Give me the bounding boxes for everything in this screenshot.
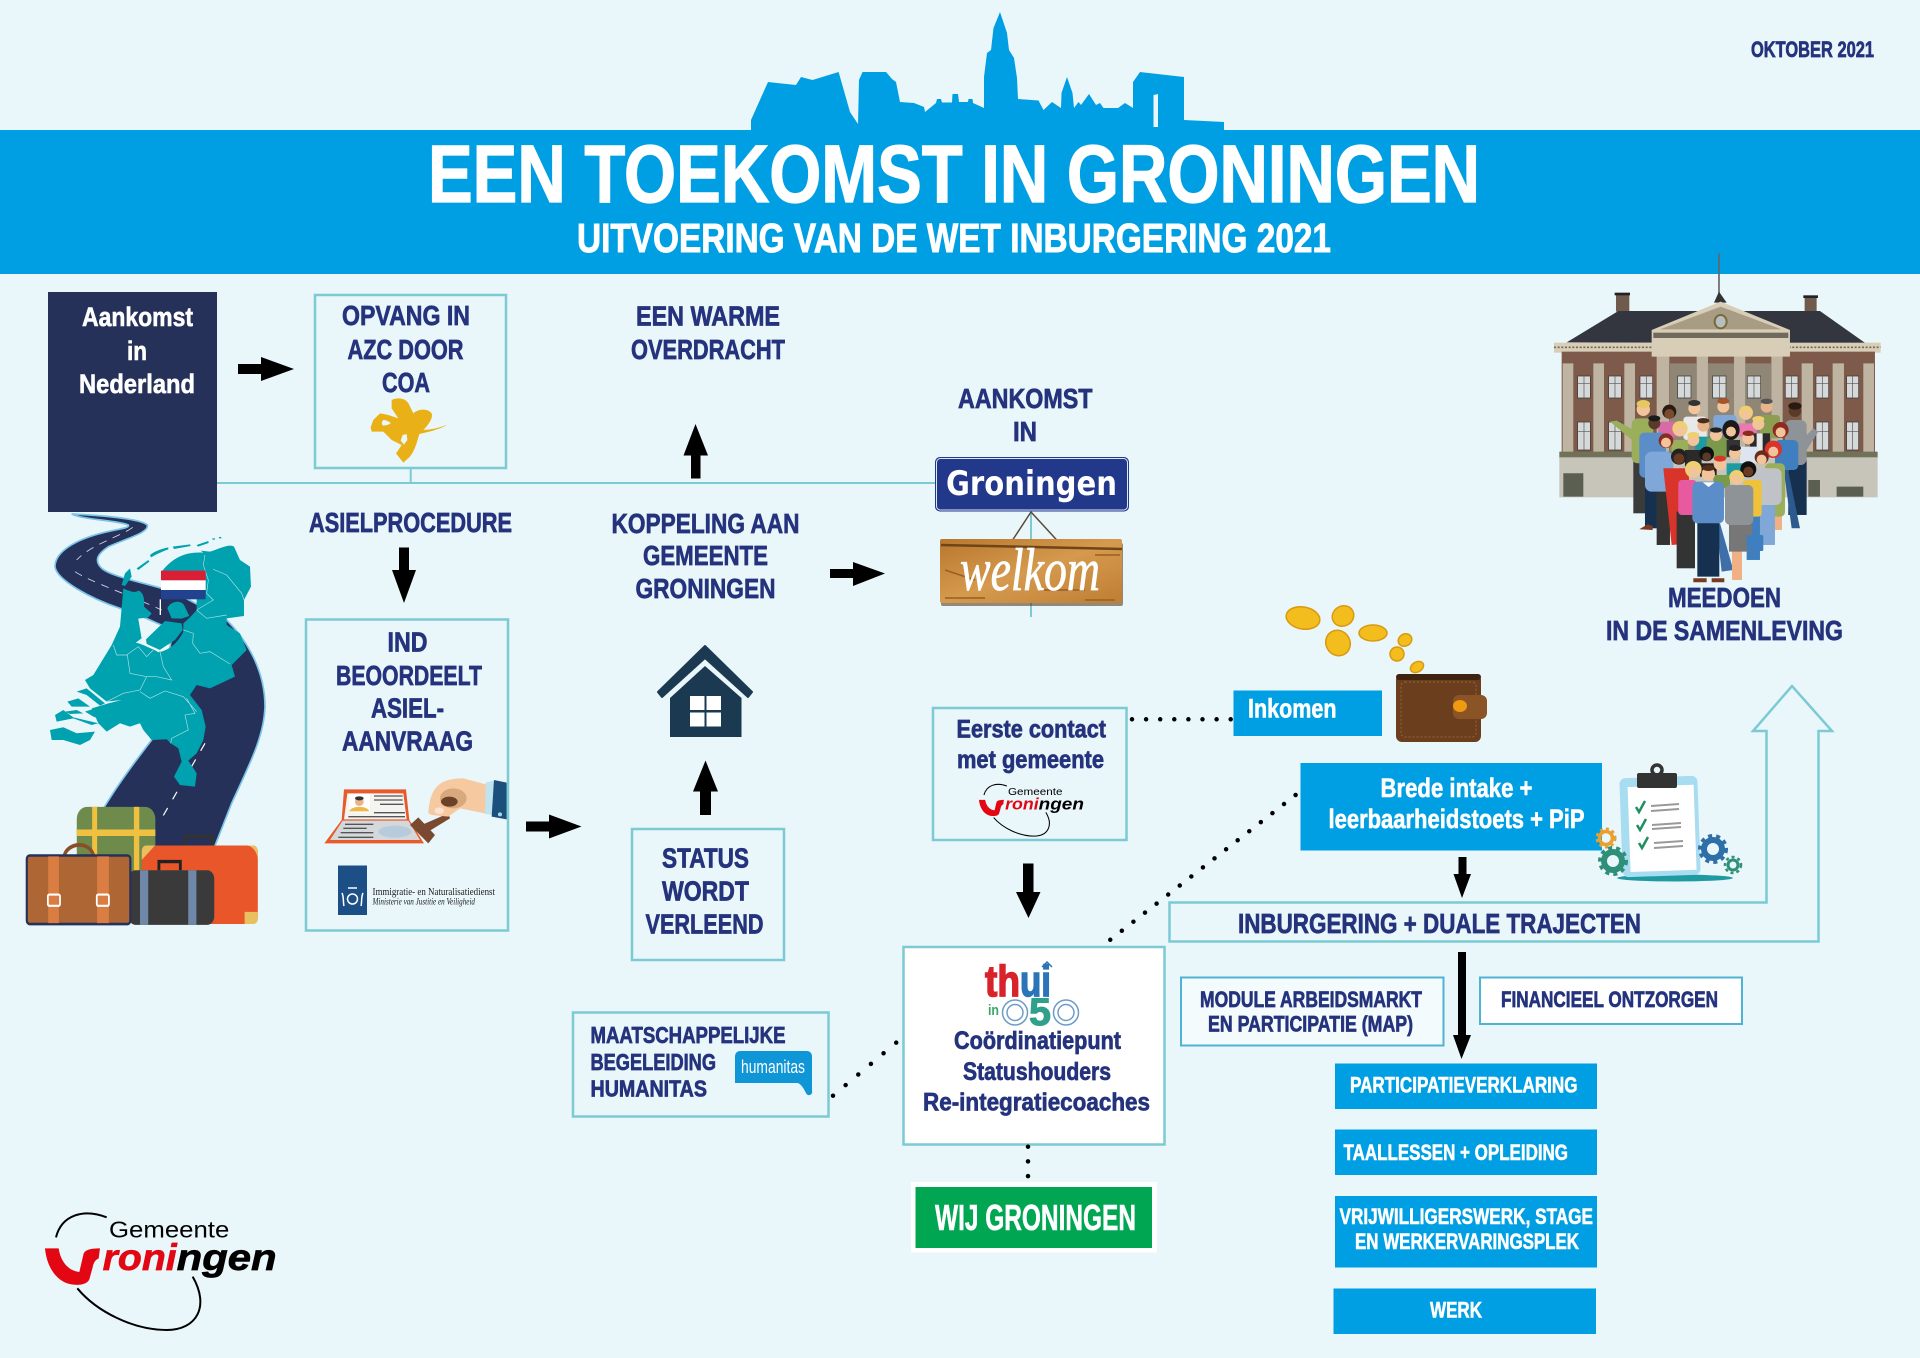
subtitle: UITVOERING VAN DE WET INBURGERING 2021 (577, 215, 1331, 261)
dotted line to inkomen (1132, 717, 1231, 722)
panel: IND beoordeelt asielaanvraag: ASIEL- (371, 692, 444, 724)
panel: module arbeidsmarkt en participatie: MODULE ARBEIDSMARKT (1200, 987, 1422, 1012)
brown suitcase (27, 845, 130, 924)
logo: gemeente Groningen small: Gemeente (1008, 787, 1063, 798)
panel: status wordt verleend (632, 829, 784, 960)
arrow down to coordinatiepunt (1016, 864, 1040, 918)
panel: opvang in AZC door COA: OPVANG IN (342, 300, 470, 331)
panel: status wordt verleend: STATUS (662, 842, 749, 874)
title: EEN TOEKOMST IN GRONINGEN (428, 129, 1480, 220)
panel: eerste contact met gemeente: met gemeente (957, 746, 1104, 774)
panel: financieel ontzorgen: FINANCIEEL ONTZORGEN (1501, 987, 1718, 1012)
IND logo: Ministerie van Justitie en Veiligheid (372, 898, 475, 908)
IND logo (338, 866, 495, 915)
illustration: suitcases (27, 807, 258, 925)
panel: werk (1334, 1288, 1596, 1334)
heading: een warme overdracht: OVERDRACHT (631, 334, 785, 365)
panel: status wordt verleend: WORDT (662, 876, 749, 906)
dotted line from coordinatiepunt to brede intake (1110, 795, 1296, 940)
map: IJsselmeer water (136, 619, 155, 644)
sign: Groningen (935, 457, 1129, 512)
heading: meedoen in de samenleving (1606, 582, 1843, 646)
flag of the Netherlands (160, 571, 206, 615)
sign: welkom (940, 512, 1123, 606)
heading: meedoen in de samenleving: MEEDOEN (1668, 582, 1781, 613)
map: islands, Flevoland and Zeeland (50, 537, 221, 745)
black suitcase (129, 862, 214, 925)
panel: module arbeidsmarkt en participatie: EN PARTICIPATIE (MAP) (1208, 1012, 1413, 1036)
panel: werk: WERK (1430, 1298, 1482, 1322)
heading: een warme overdracht (631, 300, 785, 365)
arrow up to warme overdracht (684, 424, 708, 478)
panel: module arbeidsmarkt en participatie (1181, 978, 1444, 1046)
panel: IND beoordeelt asielaanvraag: IND (388, 626, 428, 658)
sign: Groningen: Groningen (946, 464, 1117, 504)
arrow down from brede intake (1454, 857, 1471, 898)
logo: humanitas speech bubble (735, 1051, 812, 1095)
panel: maatschappelijke begeleiding Humanitas (573, 1012, 828, 1116)
panel: brede intake (1300, 763, 1602, 850)
panel: opvang in AZC door COA: AZC DOOR (348, 334, 464, 365)
panel: brede intake: Brede intake + (1380, 773, 1532, 803)
icon: passport and stamp (324, 778, 507, 843)
green suitcase (77, 807, 155, 881)
illustration: city hall with crowd of people (1554, 253, 1881, 582)
panel: inkomen: Inkomen (1248, 694, 1336, 724)
panel: coordinatiepunt statushouders (904, 947, 1164, 1144)
arrow down to IND (392, 548, 416, 603)
icon: wallet (1396, 674, 1487, 742)
logo: thuis in 050: in (988, 1002, 999, 1019)
IND logo: Immigratie- en Naturalisatiedienst (372, 887, 495, 898)
logo: gemeente Groningen small: roni (1005, 796, 1039, 813)
panel: aankomst in Nederland: Nederland (79, 369, 195, 399)
crowd of people (1610, 398, 1818, 582)
connector line (217, 468, 1031, 617)
arrow up to house (693, 760, 718, 815)
heading: een warme overdracht: EEN WARME (636, 300, 780, 332)
panel: opvang in AZC door COA: COA (382, 367, 430, 398)
logo: thuis in 050 (985, 957, 1078, 1034)
date: OKTOBER 2021 (1751, 37, 1874, 62)
logo: gemeente Groningen small (979, 784, 1084, 836)
panel: participatieverklaring: PARTICIPATIEVERKLARING (1350, 1072, 1578, 1098)
heading: koppeling aan gemeente Groningen (612, 508, 800, 604)
panel: eerste contact met gemeente: Eerste contact (956, 716, 1107, 744)
panel: IND beoordeelt asielaanvraag (306, 620, 508, 930)
panel: aankomst in Nederland (48, 292, 217, 512)
icon: COA logo (371, 398, 447, 463)
heading: koppeling aan gemeente Groningen: GEMEENTE (643, 540, 768, 571)
arrow right from IND (526, 814, 582, 838)
panel: taallessen en opleiding (1335, 1130, 1597, 1175)
panel: taallessen en opleiding: TAALLESSEN + OPLEIDING (1344, 1140, 1568, 1165)
logo: gemeente Groningen: roni (103, 1237, 178, 1278)
arrow shape: inburgering and duale trajecten to meedoen (1170, 686, 1832, 942)
panel: vrijwilligerswerk, stage en werkervaringsplek (1335, 1196, 1597, 1268)
road markings (75, 527, 162, 610)
panel: WIJ Groningen: WIJ GRONINGEN (935, 1197, 1136, 1238)
panel: IND beoordeelt asielaanvraag: BEOORDEELT (336, 660, 482, 691)
road (55, 514, 265, 850)
logo: gemeente Groningen: Gemeente (109, 1216, 229, 1242)
heading: koppeling aan gemeente Groningen: GRONINGEN (636, 573, 776, 604)
panel: vrijwilligerswerk, stage en werkervaringsplek: VRIJWILLIGERSWERK, STAGE (1340, 1204, 1593, 1229)
sign: welkom: welkom (960, 537, 1100, 603)
panel: maatschappelijke begeleiding Humanitas: BEGELEIDING (590, 1049, 716, 1075)
map of the Netherlands (85, 546, 251, 787)
panel: coordinatiepunt statushouders: Re-integratiecoaches (923, 1088, 1150, 1116)
panel: brede intake: leerbaarheidstoets + PiP (1328, 804, 1584, 834)
dotted line humanitas to coordinatiepunt (833, 1042, 897, 1096)
panel: maatschappelijke begeleiding Humanitas: MAATSCHAPPELIJKE (590, 1022, 786, 1048)
city hall building (1554, 253, 1881, 497)
logo: thuis in 050: ui (1020, 957, 1051, 1006)
header band with title (0, 12, 1920, 274)
panel: eerste contact met gemeente (933, 708, 1126, 840)
illustration: road and map of the Netherlands (50, 514, 265, 850)
panel: opvang in AZC door COA (315, 295, 506, 468)
panel: coordinatiepunt statushouders: Statushouders (963, 1058, 1111, 1086)
panel: status wordt verleend: VERLEEND (646, 908, 764, 940)
panel: aankomst in Nederland: Aankomst (82, 302, 193, 332)
logo: thuis in 050: th (985, 957, 1020, 1006)
panel: IND beoordeelt asielaanvraag: AANVRAAG (342, 726, 473, 756)
long arrow down to participatieverklaring (1453, 952, 1471, 1059)
panel: inkomen (1234, 690, 1382, 736)
icon: coins (1284, 602, 1426, 675)
panel: financieel ontzorgen (1480, 978, 1742, 1024)
logo: thuis in 050: 5 (1029, 991, 1051, 1034)
heading: koppeling aan gemeente Groningen: KOPPELING AAN (612, 508, 800, 539)
logo: gemeente Groningen: ngen (177, 1237, 277, 1278)
dotted line to WIJ Groningen (1026, 1147, 1030, 1177)
arrow right to opvang (238, 357, 294, 381)
logo: gemeente Groningen small: ngen (1039, 796, 1084, 813)
heading: meedoen in de samenleving: IN DE SAMENLEVING (1606, 615, 1843, 646)
logo: humanitas speech bubble: humanitas (741, 1057, 805, 1077)
icon: Groningen skyline silhouette (751, 12, 1224, 131)
map: province borders (107, 555, 244, 743)
heading: aankomst in (958, 383, 1092, 447)
icon: clipboard with gears (1597, 765, 1741, 882)
orange suitcase (142, 836, 258, 924)
arrow shape: inburgering and duale trajecten to meedoen: INBURGERING + DUALE TRAJECTEN (1238, 908, 1641, 939)
heading: aankomst in: AANKOMST (958, 383, 1092, 414)
panel: WIJ Groningen (911, 1182, 1157, 1252)
icon: house (658, 646, 752, 737)
panel: vrijwilligerswerk, stage en werkervaringsplek: EN WERKERVARINGSPLEK (1355, 1229, 1579, 1254)
panel: coordinatiepunt statushouders: Coördinatiepunt (954, 1027, 1122, 1055)
panel: aankomst in Nederland: in (127, 336, 147, 366)
panel: maatschappelijke begeleiding Humanitas: HUMANITAS (590, 1076, 707, 1102)
logo: gemeente Groningen (45, 1213, 277, 1330)
heading: asielprocedure: ASIELPROCEDURE (309, 507, 512, 538)
panel: participatieverklaring (1335, 1064, 1597, 1109)
heading: aankomst in: IN (1013, 416, 1037, 447)
arrow right to welkom (830, 562, 885, 586)
